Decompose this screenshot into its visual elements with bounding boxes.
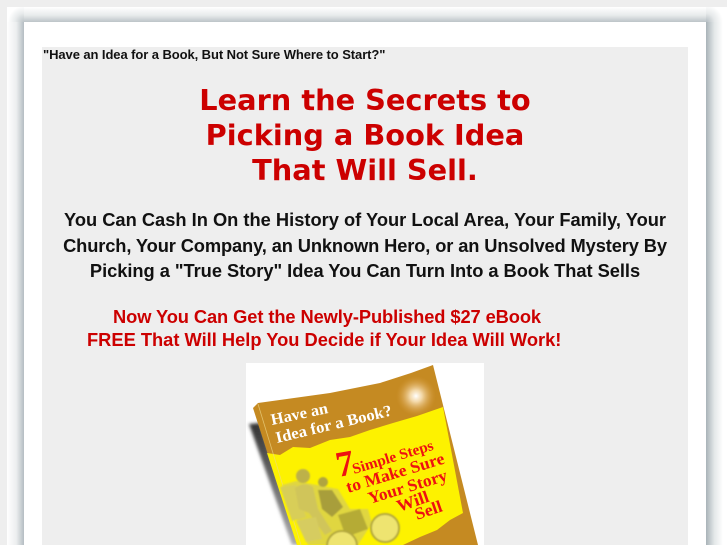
book title text: Simple Steps xyxy=(350,438,436,478)
free ebook offer xyxy=(87,306,561,350)
icon: yellow cover area xyxy=(267,407,463,545)
icon: book body xyxy=(253,365,478,545)
book title text: Idea for a Book? xyxy=(274,403,394,447)
icon: book shadow xyxy=(249,423,300,545)
free ebook offer: FREE That Will Help You Decide if Your Idea Will Work! xyxy=(87,329,561,350)
book title text: Sell xyxy=(412,497,445,524)
book title text: 7 xyxy=(332,442,357,485)
subheadline: Picking a "True Story" Idea You Can Turn Into a Book That Sells xyxy=(90,260,640,281)
main headline: Picking a Book Idea xyxy=(206,118,524,152)
icon: spine highlight xyxy=(258,404,301,545)
main headline xyxy=(199,83,531,187)
book cover image xyxy=(246,363,484,545)
book title text: Your Story xyxy=(366,466,450,508)
kicker question: "Have an Idea for a Book, But Not Sure Where to Start?" xyxy=(43,47,385,62)
subheadline xyxy=(63,209,667,281)
book title text: to Make Sure xyxy=(344,449,447,497)
book title text: Will xyxy=(394,487,432,516)
icon: vintage car photo xyxy=(280,469,399,545)
subheadline: You Can Cash In On the History of Your Local Area, Your Family, Your xyxy=(64,209,666,230)
book title text xyxy=(269,400,450,524)
main headline: Learn the Secrets to xyxy=(199,83,531,117)
free ebook offer: Now You Can Get the Newly-Published $27 eBook xyxy=(113,306,541,327)
icon: sun glare xyxy=(396,376,436,416)
main headline: That Will Sell. xyxy=(252,153,478,187)
subheadline: Church, Your Company, an Unknown Hero, or an Unsolved Mystery By xyxy=(63,234,667,256)
book title text: Have an xyxy=(269,400,330,429)
